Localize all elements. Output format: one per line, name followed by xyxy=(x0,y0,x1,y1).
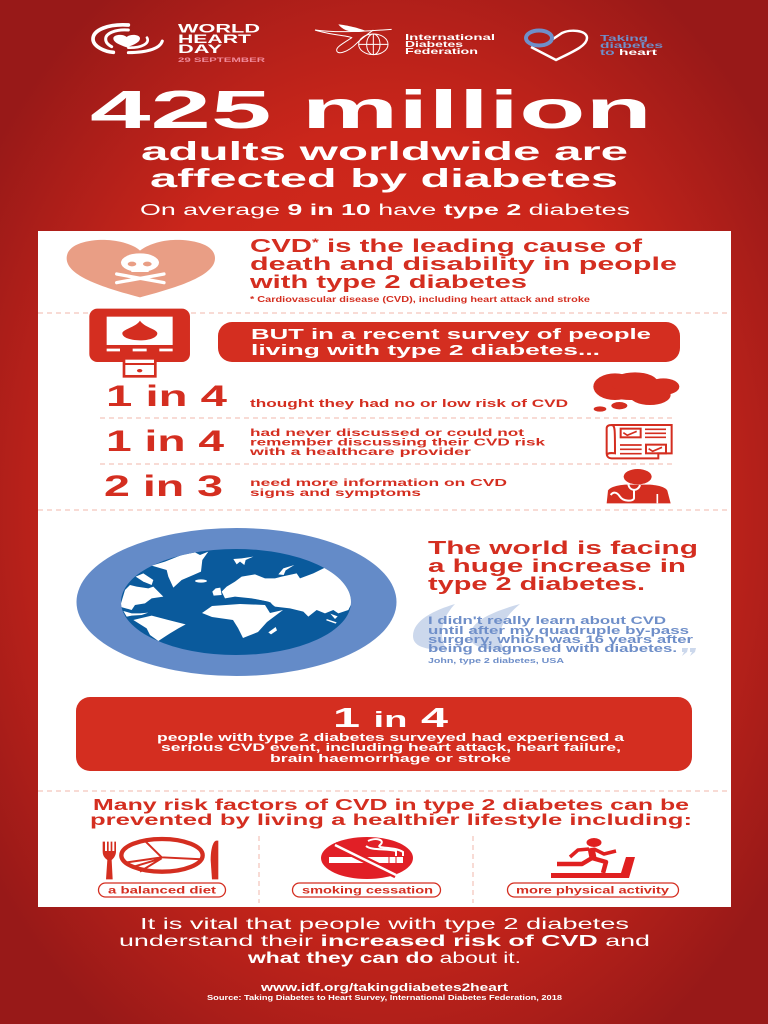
logo: International Diabetes Federation xyxy=(315,24,495,56)
callout: 1 in 4 serious CVD event: serious CVD event, including heart attack, heart failure, xyxy=(161,742,621,754)
heading: risk factors: Many risk factors of CVD in type 2 diabetes can be xyxy=(93,797,689,814)
icon: checklist document xyxy=(607,425,672,458)
closing message xyxy=(119,916,650,967)
title: adults worldwide are xyxy=(141,136,628,166)
icon: thought cloud xyxy=(593,372,679,412)
text: CVD leading cause: * Cardiovascular disease (CVD), including heart attack and stroke xyxy=(250,295,591,304)
stat: 1 in 4 never discussed: with a healthcare provider xyxy=(248,446,471,458)
callout: survey banner: living with type 2 diabetes... xyxy=(251,342,600,359)
label: more physical activity xyxy=(508,883,678,897)
logo: World Heart Day: 29 SEPTEMBER xyxy=(178,57,266,64)
logo: International Diabetes Federation: Federation xyxy=(405,46,478,56)
heading: world facing increase: a huge increase in xyxy=(428,556,686,576)
text: CVD leading cause: with type 2 diabetes xyxy=(248,271,527,292)
label: a balanced diet: a balanced diet xyxy=(108,886,217,896)
logo: World Heart Day: HEART xyxy=(178,34,251,46)
heading: world facing increase: type 2 diabetes. xyxy=(428,574,645,594)
heading: risk factors xyxy=(90,797,692,829)
stat: 1 in 4 low risk: thought they had no or low risk of CVD xyxy=(250,398,568,410)
stat: 1 in 4 never discussed: 1 in 4 xyxy=(106,425,224,458)
text: CVD leading cause xyxy=(248,235,677,304)
callout: survey banner xyxy=(218,322,680,362)
text: CVD leading cause: * xyxy=(312,237,320,249)
callout: 1 in 4 serious CVD event xyxy=(76,697,692,771)
stat: 2 in 3 need information: 2 in 3 xyxy=(104,470,223,503)
panel: white content xyxy=(38,231,731,907)
icon: doctor with stethoscope xyxy=(607,469,671,503)
stat: 1 in 4 low risk xyxy=(106,380,568,413)
quote from John: surgery, which was 16 years after xyxy=(428,634,694,646)
logo: Taking diabetes to heart: diabetes xyxy=(600,40,663,50)
label: smoking cessation xyxy=(292,883,440,897)
stat: 2 in 3 need information xyxy=(104,470,508,503)
title xyxy=(90,80,652,193)
closing message: understand their increased risk of CVD and xyxy=(119,933,650,950)
callout: 1 in 4 serious CVD event: brain haemorrhage or stroke xyxy=(270,753,511,765)
stat: 1 in 4 never discussed xyxy=(106,425,545,458)
icon: person on treadmill xyxy=(551,838,635,878)
logo: Taking diabetes to heart xyxy=(526,30,663,60)
closing message: what they can do about it. xyxy=(247,950,521,967)
icon: no smoking xyxy=(321,837,413,879)
logo: World Heart Day xyxy=(93,24,266,64)
logo: International Diabetes Federation: Diabetes xyxy=(405,39,463,49)
logo: World Heart Day: DAY xyxy=(178,44,223,56)
callout: 1 in 4 serious CVD event: people with type 2 diabetes surveyed had experienced a xyxy=(157,732,625,744)
callout: survey banner: BUT in a recent survey of people xyxy=(251,326,651,343)
label: a balanced diet xyxy=(98,883,226,897)
stat: 2 in 3 need information: need more information on CVD xyxy=(250,477,508,489)
title: affected by diabetes xyxy=(150,163,618,193)
quote from John: until after my quadruple by-pass xyxy=(428,625,689,637)
icon: heart with skull and crossbones xyxy=(67,240,215,297)
icon: blood glucose meter xyxy=(89,309,190,376)
website and source: Source: Taking Diabetes to Heart Survey, International Diabetes Federation, 2018 xyxy=(207,993,562,1002)
logo: World Heart Day: WORLD xyxy=(178,24,260,36)
stat: 1 in 4 never discussed: remember discussing their CVD risk xyxy=(250,436,545,448)
quote from John: John, type 2 diabetes, USA xyxy=(428,656,565,665)
globe illustration xyxy=(76,528,396,676)
icon: balanced diet plate xyxy=(103,839,218,879)
stat: 1 in 4 low risk: 1 in 4 xyxy=(106,380,227,413)
heading: risk factors: prevented by living a healthier lifestyle including: xyxy=(90,812,692,829)
quote from John: being diagnosed with diabetes. xyxy=(428,643,677,655)
stat: 2 in 3 need information: signs and symptoms xyxy=(250,487,421,499)
text: CVD leading cause: death and disability in people xyxy=(250,253,677,274)
title: 425 million xyxy=(90,80,652,140)
subtitle: On average 9 in 10 have type 2 diabetes xyxy=(140,202,630,219)
heading: world facing increase: The world is facing xyxy=(428,538,698,558)
website and source: www.idf.org/takingdiabetes2heart xyxy=(260,982,508,994)
heading: world facing increase xyxy=(428,538,698,594)
quote from John: I didn't really learn about CVD xyxy=(428,615,666,627)
callout: 1 in 4 serious CVD event: 1 in 4 xyxy=(333,702,449,733)
logo: Taking diabetes to heart: Taking xyxy=(600,33,648,43)
closing message: It is vital that people with type 2 diabetes xyxy=(140,916,629,933)
website and source xyxy=(207,982,562,1002)
quote from John xyxy=(413,604,696,665)
label: smoking cessation: smoking cessation xyxy=(302,886,433,896)
logo: Taking diabetes to heart: to heart xyxy=(600,47,657,57)
text: CVD leading cause: is the leading cause of xyxy=(319,235,643,256)
stat: 1 in 4 never discussed: had never discussed or could not xyxy=(250,427,525,439)
text: CVD leading cause: CVD xyxy=(250,235,289,256)
label: more physical activity: more physical activity xyxy=(516,886,670,896)
logo: International Diabetes Federation: International xyxy=(405,32,495,42)
